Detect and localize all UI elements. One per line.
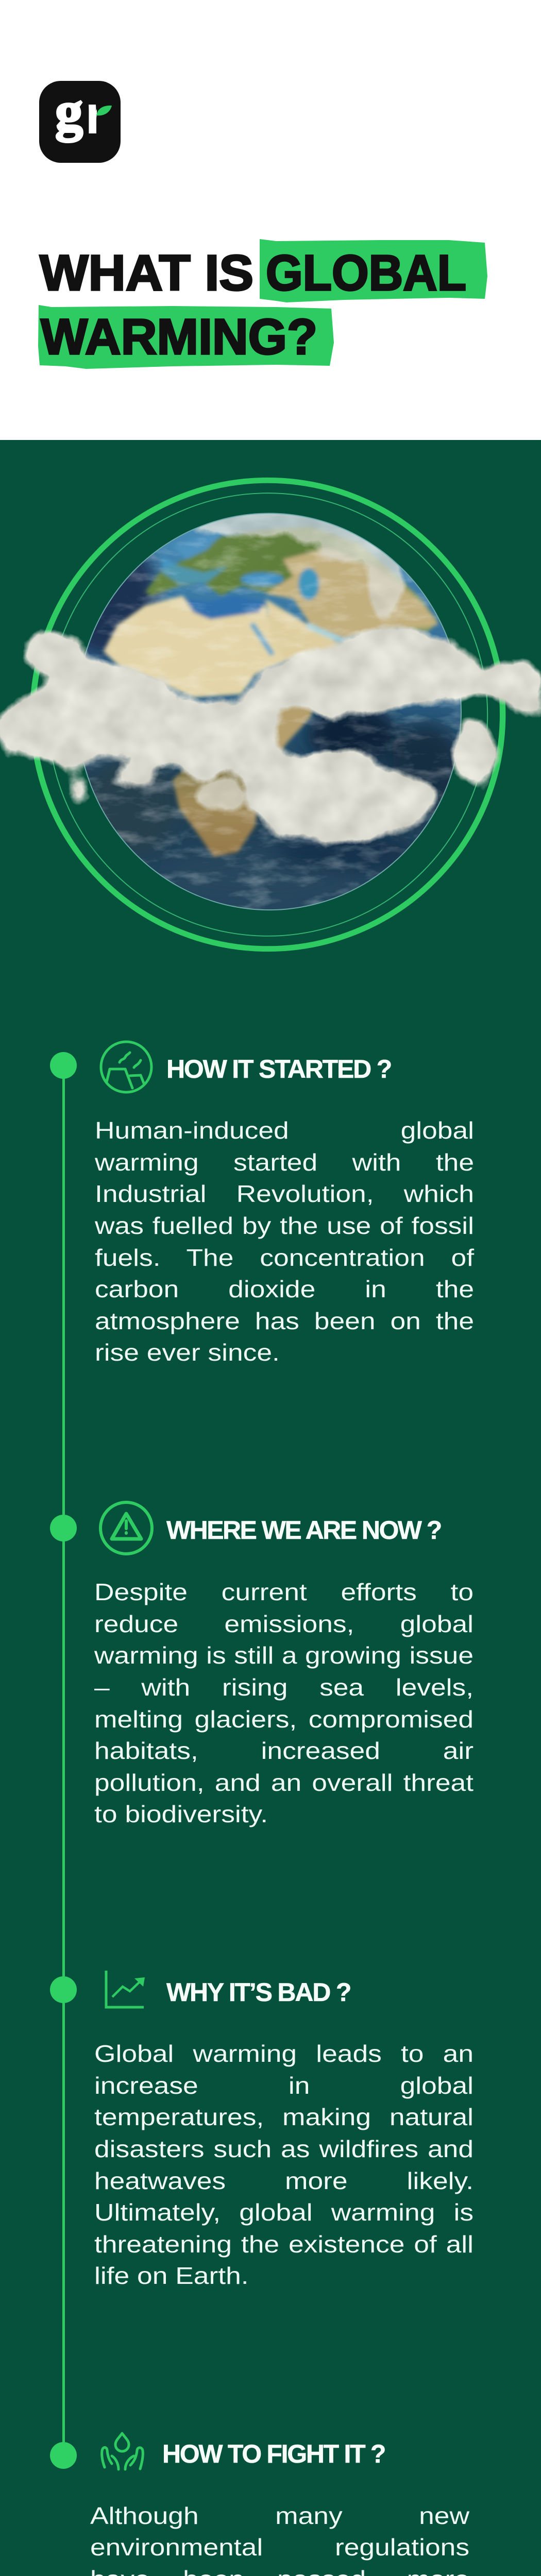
timeline dot bbox=[50, 1976, 77, 2003]
body text: reduce emissions, global bbox=[94, 1611, 474, 1637]
body text bbox=[95, 1117, 474, 1366]
title bbox=[38, 239, 487, 369]
section: why it's bad bbox=[50, 1971, 474, 2289]
body text: warming started with the bbox=[95, 1149, 474, 1176]
icon: hands holding water drop bbox=[100, 2432, 144, 2471]
body text: pollution, and an overall threat bbox=[94, 1769, 474, 1796]
section: where we are now bbox=[50, 1501, 474, 1827]
body text: threatening the existence of all bbox=[94, 2231, 474, 2258]
heading: HOW IT STARTED ? bbox=[166, 1055, 391, 1083]
clouds bbox=[0, 629, 541, 842]
heading: WHERE WE ARE NOW ? bbox=[166, 1516, 441, 1545]
timeline dot bbox=[50, 1515, 77, 1541]
title: WHAT IS bbox=[40, 245, 253, 301]
illustration: earth with clouds and rings bbox=[0, 477, 541, 952]
body text: Ultimately, global warming is bbox=[94, 2199, 474, 2226]
body text: habitats, increased air bbox=[94, 1737, 474, 1764]
section: how to fight it bbox=[50, 2432, 470, 2576]
body text: heatwaves more likely. bbox=[94, 2167, 474, 2194]
body text: life on Earth. bbox=[94, 2262, 249, 2289]
section: how it started bbox=[50, 1041, 474, 1366]
timeline dot bbox=[50, 2442, 77, 2469]
earth globe bbox=[55, 510, 469, 914]
body text: to biodiversity. bbox=[94, 1801, 268, 1827]
body text: temperatures, making natural bbox=[94, 2104, 474, 2130]
inner ring bbox=[48, 493, 487, 936]
body text: rise ever since. bbox=[95, 1339, 280, 1366]
body text: increase in global bbox=[94, 2072, 474, 2099]
logo: gr app icon bbox=[39, 81, 121, 163]
body text bbox=[90, 2502, 470, 2576]
title: WARMING? bbox=[41, 309, 317, 365]
body text: atmosphere has been on the bbox=[95, 1308, 474, 1334]
body text: Industrial Revolution, which bbox=[95, 1180, 474, 1207]
title: GLOBAL bbox=[266, 245, 466, 301]
body text: Although many new bbox=[90, 2502, 469, 2529]
icon: rising line chart bbox=[105, 1971, 145, 2008]
body text: – with rising sea levels, bbox=[94, 1674, 474, 1701]
heading: HOW TO FIGHT IT ? bbox=[162, 2439, 385, 2468]
outer ring bbox=[33, 480, 503, 949]
logo: gr app icon: r bbox=[85, 84, 106, 145]
body text: Global warming leads to an bbox=[94, 2040, 474, 2067]
body text: Human-induced global bbox=[95, 1117, 474, 1144]
logo: gr app icon: g bbox=[55, 81, 83, 142]
body text bbox=[94, 2040, 474, 2289]
timeline dot bbox=[50, 1052, 77, 1079]
body text: melting glaciers, compromised bbox=[94, 1706, 474, 1733]
body text: fuels. The concentration of bbox=[95, 1244, 474, 1271]
heading: WHY IT’S BAD ? bbox=[166, 1978, 350, 2007]
body text: carbon dioxide in the bbox=[95, 1276, 474, 1302]
body text: environmental regulations bbox=[90, 2534, 469, 2561]
icon: factory in circle bbox=[100, 1041, 153, 1093]
body text bbox=[94, 1579, 474, 1827]
timeline line bbox=[62, 1065, 65, 2455]
body text: warming is still a growing issue bbox=[94, 1642, 474, 1669]
icon: warning triangle in circle bbox=[99, 1501, 154, 1555]
body text: was fuelled by the use of fossil bbox=[95, 1212, 474, 1239]
body text: Despite current efforts to bbox=[94, 1579, 474, 1605]
body text: disasters such as wildfires and bbox=[94, 2136, 474, 2162]
